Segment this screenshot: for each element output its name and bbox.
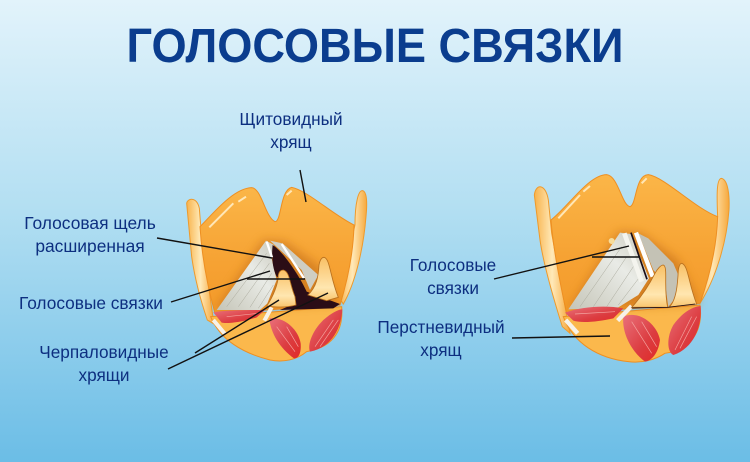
grey vocal fold right [638,233,679,307]
label: cricoid cartilage: Перстневидный [377,317,505,337]
thyroid cartilage [200,187,354,313]
white cord edges [267,242,304,278]
label: glottis widened: Голосовая щель [24,213,156,233]
highlights [209,191,292,227]
label: cricoid cartilage [377,317,505,360]
glottis opening [272,245,340,310]
label: vocal cords right [410,255,496,298]
left muscle [213,310,265,323]
lower left muscle [623,315,660,362]
highlights [558,178,647,218]
label: glottis widened [24,213,156,256]
label: cricoid cartilage: хрящ [420,340,462,360]
label: arytenoid cartilages [39,342,169,385]
left thyroid horn [187,199,214,324]
fold fibres left [227,253,273,308]
label: vocal cords right: Голосовые [410,255,496,275]
inner shadow [215,240,340,310]
grey vocal fold right [270,241,318,290]
inner shadow [568,232,700,310]
label: vocal cords right: связки [427,278,479,298]
white ligament [213,307,272,334]
white cord edge left [624,233,642,282]
label: vocal cords left: Голосовые связки [19,293,163,313]
label: arytenoid cartilages: хрящи [78,365,130,385]
illustration: closed vocal cords larynx [534,175,729,362]
muscle stripes [227,313,338,352]
lower right muscle [309,309,342,352]
left arytenoid [267,270,296,307]
label: glottis widened: расширенная [35,236,145,256]
right thyroid horn [695,178,729,303]
lower left muscle [269,318,301,358]
right arytenoid [308,257,338,301]
cricoid cartilage [563,305,701,362]
fold fibres left [580,247,640,307]
right arytenoid [669,263,697,307]
title: ГОЛОСОВЫЕ СВЯЗКИ [126,20,624,73]
illustration: open vocal cords larynx [187,187,367,361]
label: arytenoid cartilages: Черпаловидные [39,342,169,362]
label: thyroid cartilage: хрящ [270,132,312,152]
grey vocal fold left [568,233,649,309]
right thyroid horn [338,191,367,304]
white ligament [566,306,632,333]
left muscle [565,307,623,322]
left thyroid horn [534,187,570,333]
left arytenoid [632,265,668,307]
white cord edge [636,233,653,277]
small nub [609,238,615,244]
muscle stripes [575,312,697,353]
label: thyroid cartilage [239,109,343,152]
cartilage seam [632,304,695,308]
grey vocal fold left [217,241,277,310]
closed glottis [631,233,647,279]
lower right muscle [668,306,701,355]
leader lines [157,170,640,369]
thyroid cartilage [551,175,718,313]
label: thyroid cartilage: Щитовидный [239,109,343,129]
cricoid cartilage [211,307,342,361]
